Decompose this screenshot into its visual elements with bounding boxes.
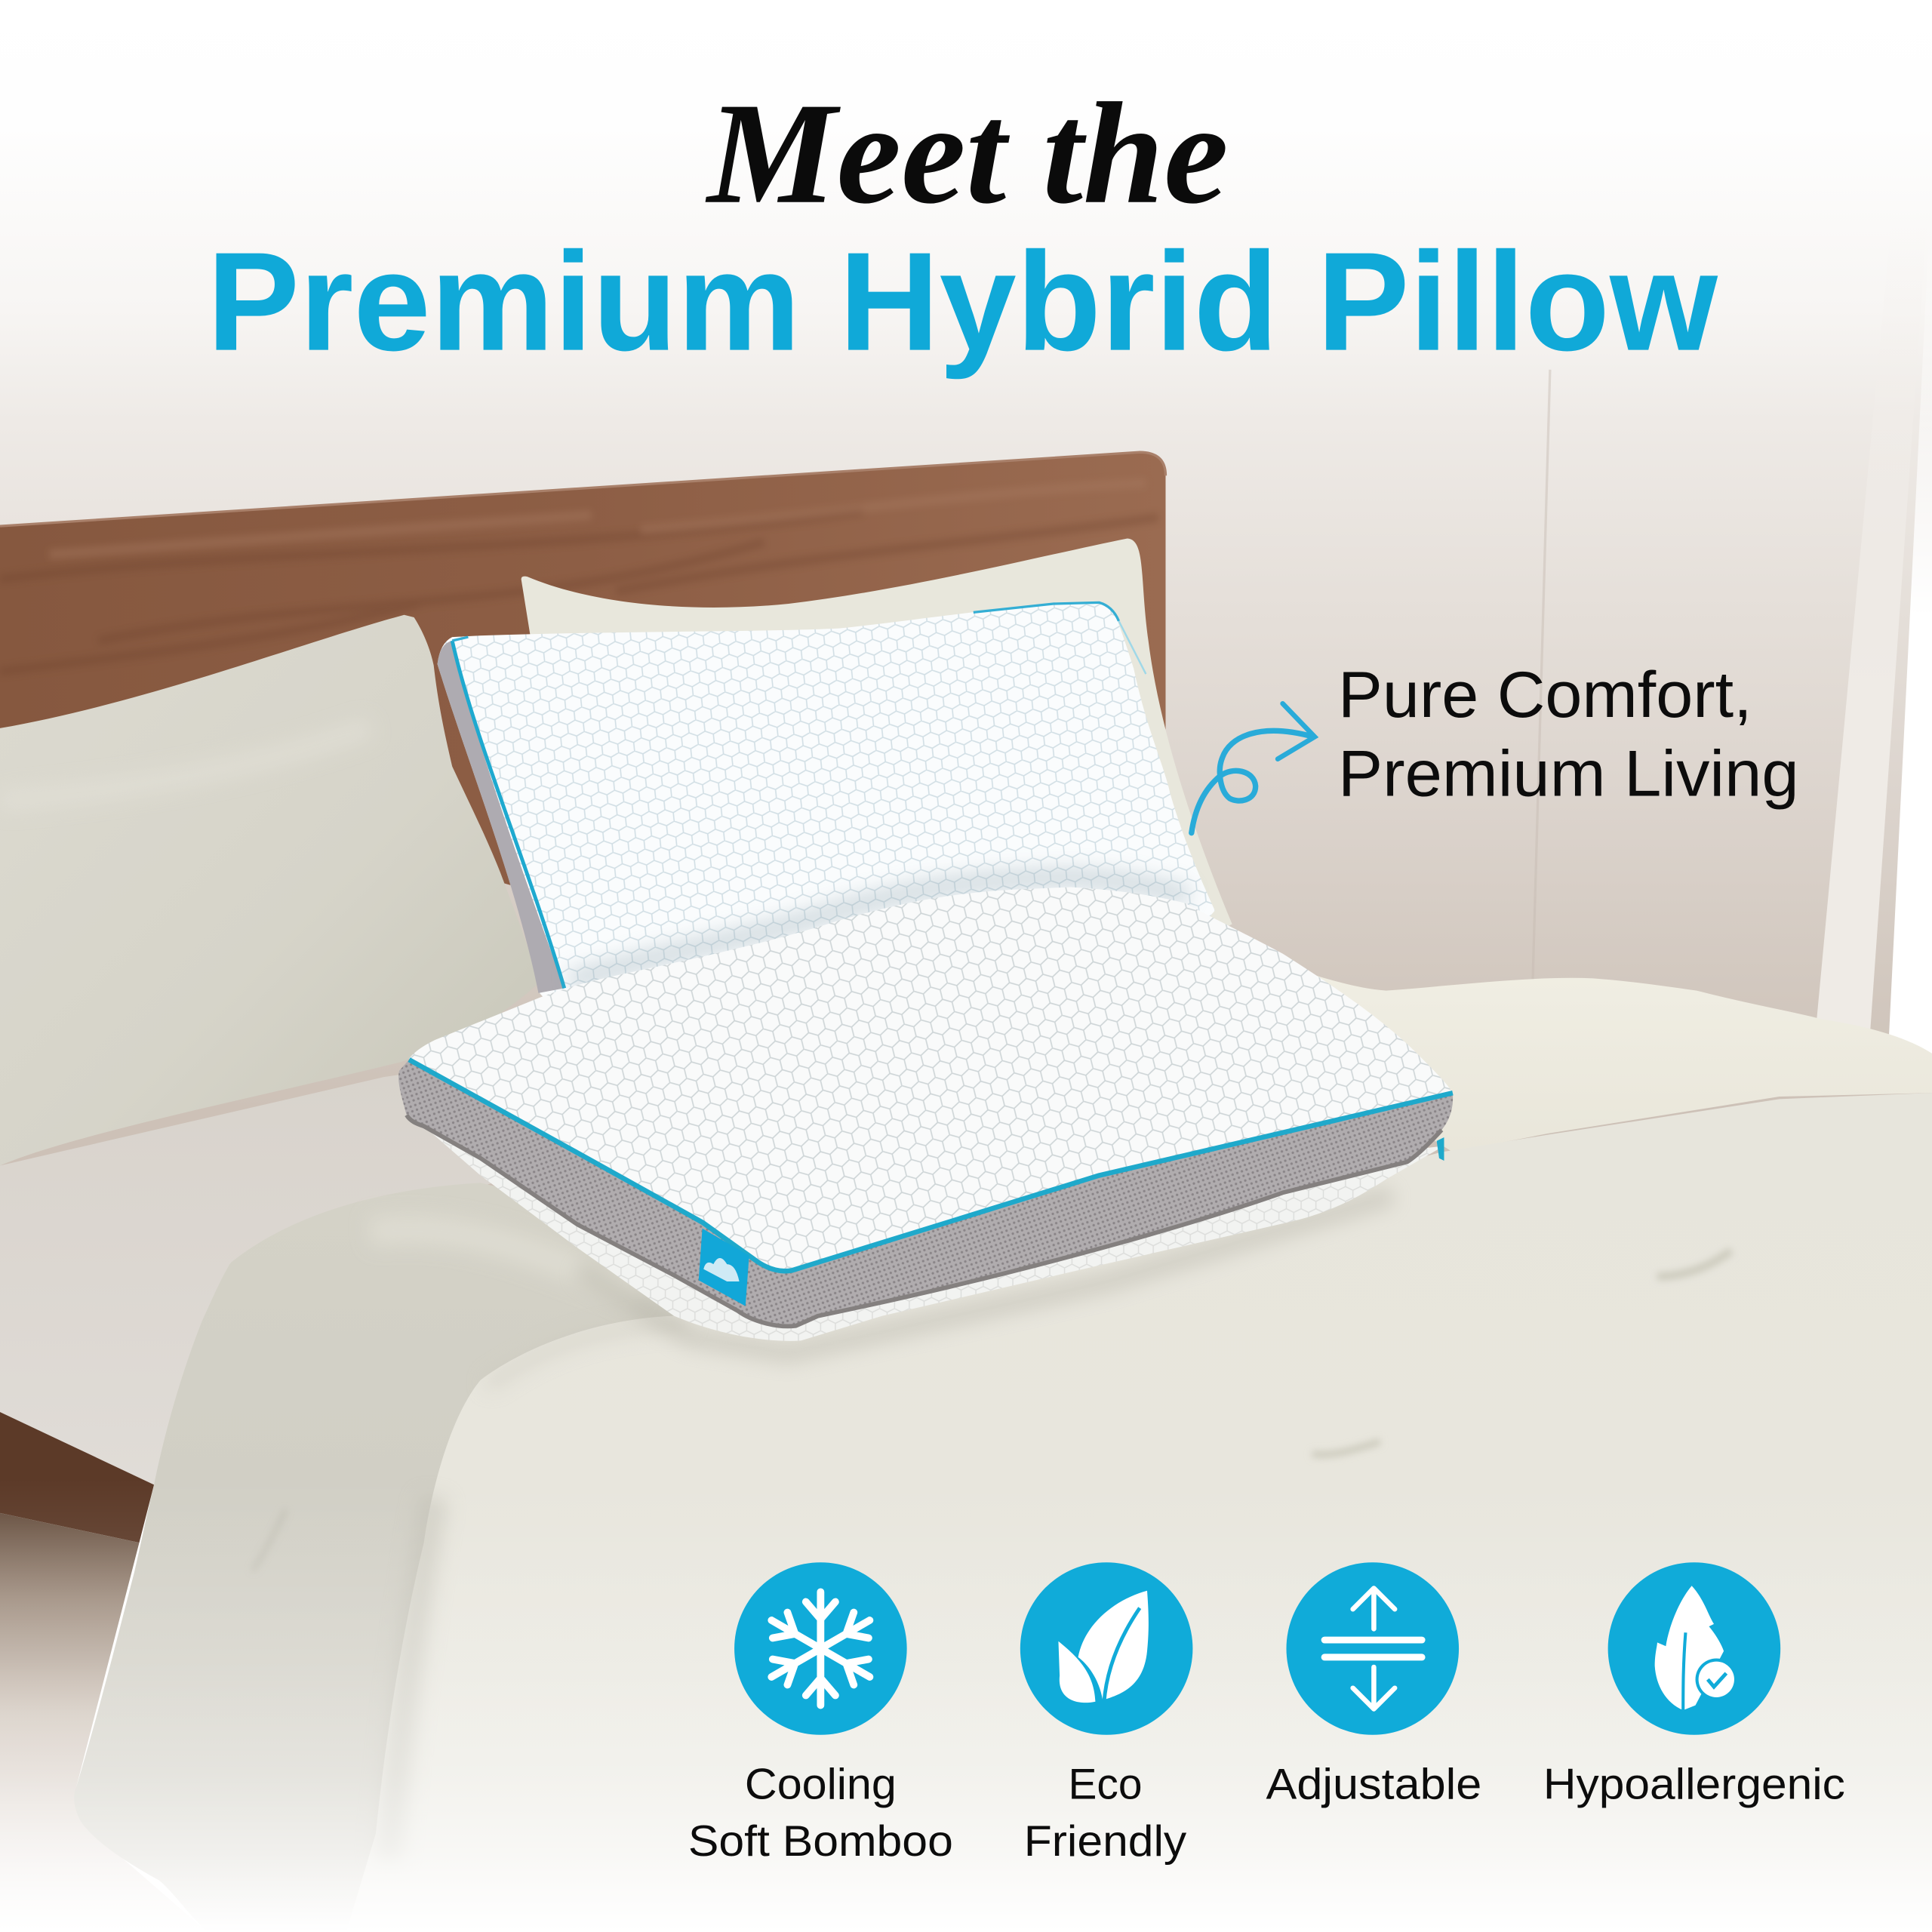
callout arrow bbox=[1192, 703, 1315, 833]
window frame bbox=[1817, 222, 1932, 1054]
label: cooling: Soft Bomboo bbox=[688, 1817, 953, 1866]
title: Premium Hybrid Pillow: Premium Hybrid Pillow bbox=[207, 224, 1718, 380]
main comforter bbox=[346, 1093, 1932, 1932]
callout text bbox=[1338, 659, 1799, 811]
feature: cooling bbox=[688, 1562, 953, 1866]
lower pillow underside bbox=[424, 1126, 1444, 1341]
label: eco friendly bbox=[1024, 1761, 1187, 1866]
feature: adjustable bbox=[1266, 1562, 1481, 1809]
label: cooling bbox=[688, 1761, 953, 1866]
feature: hypoallergenic bbox=[1543, 1562, 1845, 1809]
feature: eco friendly bbox=[1020, 1562, 1192, 1866]
bottom white fade bbox=[0, 1478, 1932, 1932]
lower pillow blue piping bbox=[409, 1060, 1453, 1271]
callout text: Premium Living bbox=[1338, 738, 1799, 811]
comforter overhang fold bbox=[74, 1183, 740, 1932]
left beige pillow bbox=[0, 615, 538, 1165]
lower pillow top face bbox=[409, 888, 1453, 1271]
title: Meet the: Meet the bbox=[705, 72, 1229, 234]
icon: snowflake bbox=[734, 1562, 907, 1735]
label: cooling: Cooling bbox=[745, 1761, 897, 1809]
fitted sheet bbox=[0, 1072, 493, 1484]
floor bbox=[0, 1513, 207, 1932]
product pillow: lower bbox=[398, 888, 1453, 1341]
pillow shadow bbox=[579, 1195, 1392, 1353]
icon: up and down arrows bbox=[1286, 1562, 1459, 1735]
icon: leaves bbox=[1020, 1562, 1192, 1735]
icon: leaf with check badge bbox=[1608, 1562, 1780, 1735]
upper comforter fold bbox=[1303, 972, 1932, 1152]
product pillow: upper bbox=[438, 602, 1215, 1023]
label: eco friendly: Friendly bbox=[1024, 1817, 1187, 1866]
callout text: Pure Comfort, bbox=[1338, 659, 1752, 731]
back pillow behind product bbox=[521, 538, 1232, 949]
background wall bbox=[0, 0, 1932, 1232]
wooden headboard bbox=[0, 452, 1165, 888]
brand tag bbox=[699, 1229, 749, 1306]
bed frame beam bbox=[0, 1412, 154, 1543]
label: adjustable: Adjustable bbox=[1266, 1761, 1481, 1809]
label: hypoallergenic: Hypoallergenic bbox=[1543, 1761, 1845, 1809]
label: eco friendly: Eco bbox=[1069, 1761, 1142, 1809]
lower pillow mesh band bbox=[398, 1060, 1453, 1326]
